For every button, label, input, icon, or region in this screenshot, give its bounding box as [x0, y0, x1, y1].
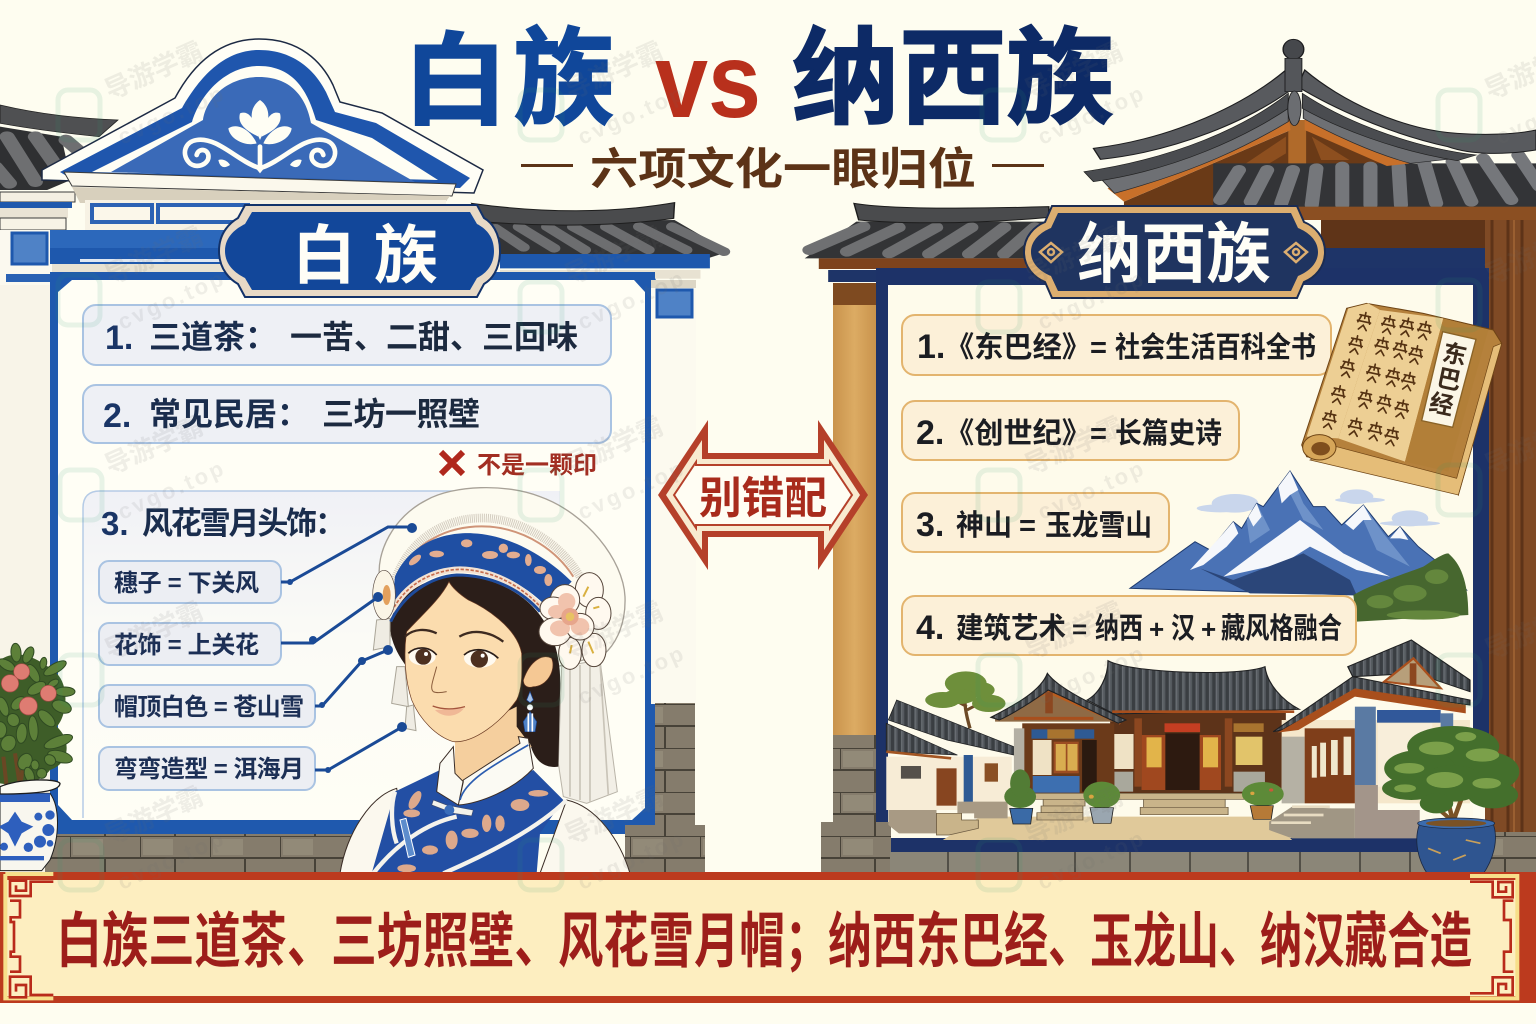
right tassel	[558, 660, 617, 803]
watermark row 3: 导游学霸	[560, 411, 667, 480]
banner: summary	[0, 872, 1536, 1003]
snow caps	[1190, 471, 1408, 577]
watermark row 5: 导游学霸	[560, 781, 667, 850]
card: Naxi item 4: 藏风格融合	[1221, 612, 1342, 645]
plant flowers	[1, 664, 56, 715]
left page	[1307, 303, 1380, 438]
watermark row 2: cvgo.top	[114, 265, 230, 335]
watermark row 1: 导游学霸	[560, 36, 667, 105]
watermark row 2: 导游学霸	[1020, 221, 1127, 290]
watermark row 1: cvgo.top	[574, 80, 690, 150]
large Naxi roof	[1084, 39, 1536, 220]
book title label	[1422, 332, 1476, 427]
tan pillar	[833, 283, 876, 870]
banner summary text: 白族三道茶、	[56, 908, 333, 975]
left wing	[886, 700, 1014, 833]
collar piping	[460, 745, 528, 800]
card: Naxi item 4: 汉	[1171, 612, 1195, 645]
face	[405, 582, 522, 742]
card: Naxi item 4: 4.	[916, 609, 944, 647]
card: Naxi item 4: 建筑艺术	[956, 612, 1066, 645]
card: Naxi item 1: 社会生活百科全书	[1115, 331, 1316, 364]
card: Naxi item 4: 纳西	[1095, 612, 1143, 645]
watermark row 1: 导游学霸	[1020, 36, 1127, 105]
navy frame	[876, 268, 1489, 852]
pill: flower: 花饰 = 上关花	[114, 632, 259, 659]
roll	[1303, 435, 1336, 460]
watermark row 2	[58, 221, 1536, 335]
subtitle: 六项文化一眼归位	[590, 145, 976, 194]
gable with floral crest	[42, 39, 483, 230]
stone base	[821, 822, 1536, 874]
banner summary text: 三坊照壁、	[331, 908, 560, 975]
watermark row 1	[58, 36, 1536, 150]
blue frame	[50, 272, 655, 834]
watermark row 4	[60, 596, 1536, 710]
blue vest	[372, 770, 563, 873]
watermark row 1: 导游学霸	[100, 36, 207, 105]
double-headed arrow: do not mismatch: 别错配	[699, 474, 827, 523]
watermark row 3: cvgo.top	[574, 455, 690, 525]
eye left	[408, 648, 437, 665]
right flower	[539, 573, 611, 669]
plant foliage mass	[0, 654, 67, 785]
card: Bai item 3: 3.	[101, 505, 129, 542]
connector dots	[287, 523, 417, 773]
watermark row 4: cvgo.top	[574, 640, 690, 710]
under tiles	[1213, 163, 1536, 208]
Dongba pictographs	[1321, 311, 1433, 446]
left roof of Naxi panel	[805, 203, 1049, 282]
vest trim	[373, 792, 567, 873]
illustration: Jade Dragon Snow Mountain	[1130, 471, 1468, 622]
watermark row 3	[60, 411, 1536, 525]
wood column	[1485, 220, 1536, 832]
peak shading	[1247, 471, 1410, 567]
watermark row 5	[60, 781, 1150, 895]
gable	[1124, 130, 1536, 208]
card: Naxi item 3: 神山	[956, 509, 1012, 542]
card: Bai item 1: 一苦、二甜、三回味	[290, 319, 578, 355]
wood beams	[1321, 220, 1536, 276]
brows	[405, 630, 503, 642]
band florals	[407, 539, 552, 586]
subtitle	[521, 145, 1044, 194]
watermark row 5: cvgo.top	[114, 825, 230, 895]
right wing	[1269, 640, 1470, 838]
card: Naxi item 3: =	[1019, 510, 1036, 542]
vest florals	[397, 789, 548, 872]
side button	[400, 818, 415, 857]
card: Naxi item 2	[902, 401, 1239, 460]
sleeves	[340, 788, 630, 873]
watermark row 5: 导游学霸	[100, 781, 207, 850]
watermark row 5: cvgo.top	[574, 825, 690, 895]
book cover	[1302, 303, 1502, 495]
card: Bai item 1: 1.	[105, 319, 133, 357]
callout: not yikeyin: 不是一颗印	[477, 452, 597, 479]
connector lines	[281, 523, 417, 773]
banner summary text: 风花雪月帽；	[558, 908, 830, 975]
pill: tassel: 穗子 = 下关风	[114, 570, 259, 597]
clouds	[1197, 489, 1440, 526]
watermark row 5: 导游学霸	[1020, 781, 1127, 850]
watermark row 3: 导游学霸	[100, 411, 207, 480]
plaque: Naxi: 纳西族	[1077, 217, 1271, 291]
mountain body	[1130, 471, 1467, 595]
card: Naxi item 4: +	[1149, 614, 1164, 644]
banner summary text: 玉龙山、	[1090, 908, 1262, 975]
book title label: 巴	[1434, 364, 1463, 396]
hall body	[1110, 712, 1286, 793]
knot ornament right	[1285, 243, 1307, 262]
steps	[936, 793, 1244, 835]
green hill	[1353, 553, 1468, 622]
nose and mouth	[432, 667, 465, 716]
watermark row 4: cvgo.top	[1034, 640, 1150, 710]
icon: Dongba scripture book	[1302, 303, 1502, 495]
card: Naxi item 4: =	[1072, 614, 1087, 644]
card: Naxi item 1: 1.	[917, 328, 945, 366]
hair	[390, 576, 560, 767]
page stack	[1310, 343, 1502, 495]
right roof of Bai panel	[472, 203, 729, 283]
potted plant 2	[1083, 782, 1120, 823]
banner right fret	[1470, 876, 1517, 998]
card: Naxi item 2: 《创世纪》	[945, 417, 1091, 450]
hill highlights	[1367, 569, 1460, 620]
plaque: Bai: 白 族	[292, 220, 438, 292]
card: Naxi item 3: 玉龙雪山	[1045, 509, 1152, 542]
card: Naxi item 3: 3.	[916, 506, 944, 544]
card: Naxi item 2: 2.	[916, 414, 944, 452]
left tassels	[373, 618, 416, 731]
plant stems	[3, 753, 24, 787]
blue beam	[50, 230, 232, 272]
watermark row 2: cvgo.top	[574, 265, 690, 335]
watermark row 4: 导游学霸	[1020, 596, 1127, 665]
card: Bai item 2: 常见民居：	[149, 396, 309, 432]
banner summary text: 纳西东巴经、	[828, 908, 1092, 975]
banner summary text	[56, 908, 1472, 975]
porcelain pot	[0, 780, 60, 871]
plant leaves	[0, 643, 75, 784]
knot ornament left	[1040, 243, 1062, 262]
ear	[523, 657, 553, 687]
watermark row 1: cvgo.top	[1034, 80, 1150, 150]
watermark row 1: cvgo.top	[114, 80, 230, 150]
panel: Bai building	[0, 39, 729, 875]
watermark row 2: 导游学霸	[100, 221, 207, 290]
double-headed arrow: do not mismatch	[658, 420, 868, 570]
scallop tiles	[1100, 105, 1457, 193]
title: Bai: 白	[403, 26, 508, 138]
pill: white top: 帽顶白色 = 苍山雪	[114, 694, 304, 721]
watermark row 3: cvgo.top	[114, 455, 230, 525]
finial	[1283, 39, 1304, 59]
eye right	[464, 649, 498, 668]
banner left fret	[5, 874, 53, 998]
second ridge	[1084, 93, 1476, 182]
card: Naxi item 4	[902, 596, 1356, 655]
knot button	[432, 800, 473, 816]
potted plant 3	[1242, 782, 1284, 819]
title	[403, 21, 1114, 140]
spine block	[1405, 318, 1488, 472]
pill: curved shape: 弯弯造型 = 洱海月	[114, 755, 304, 783]
book title label: 经	[1427, 389, 1456, 421]
panel interior	[58, 280, 645, 820]
plant and porcelain pot left	[0, 643, 75, 871]
plaque: Bai	[219, 205, 500, 297]
left side roof	[0, 105, 118, 190]
figure: Bai woman in Fenghuaxueyue headdress	[340, 488, 630, 873]
mountain shadow	[1147, 553, 1357, 595]
card: Naxi item 1	[902, 315, 1331, 375]
watermark row 4: 导游学霸	[560, 596, 667, 665]
book title label: 东	[1440, 339, 1469, 371]
card: Naxi item 3	[902, 493, 1169, 552]
watermark row 5: cvgo.top	[1034, 825, 1150, 895]
title: vs: vs	[655, 22, 761, 140]
floral ornament	[185, 100, 335, 173]
card: Naxi item 1: 《东巴经》	[945, 331, 1091, 364]
tree	[925, 671, 1006, 728]
hat red line	[397, 526, 573, 580]
right page	[1338, 310, 1443, 462]
card: Bai item 1: 三道茶：	[149, 319, 277, 355]
pill: white top	[99, 685, 315, 727]
card: Bai item 2	[83, 385, 611, 443]
left flower	[373, 570, 395, 620]
watermark row 3: 导游学霸	[1020, 411, 1127, 480]
earring	[523, 692, 537, 732]
pill: curved shape	[99, 747, 315, 790]
title: Naxi: 纳西族	[792, 21, 1114, 138]
card: Bai item 1	[83, 305, 611, 365]
right pillar	[651, 280, 696, 704]
pill: flower	[99, 623, 281, 665]
watermark row 2: 导游学霸	[560, 221, 667, 290]
potted plant 1	[1004, 769, 1036, 824]
beams	[1298, 207, 1536, 220]
card: Bai item 3	[83, 491, 560, 818]
orange eave	[1108, 117, 1410, 202]
watermark row 4: 导游学霸	[100, 596, 207, 665]
roll hole	[1311, 442, 1330, 455]
watermark row 2: cvgo.top	[1034, 265, 1150, 335]
band red dash	[392, 569, 543, 612]
tassel lines	[570, 662, 608, 802]
big potted plant	[1382, 726, 1519, 875]
pill: tassel	[99, 561, 281, 603]
blue band	[392, 533, 572, 608]
card: Naxi item 2: 长篇史诗	[1115, 417, 1222, 450]
panel: Naxi building	[805, 39, 1536, 874]
panel interior	[888, 285, 1473, 838]
illustration: Naxi courtyard house	[886, 640, 1519, 875]
band lower line	[391, 575, 540, 622]
main hall roof	[1087, 661, 1299, 714]
courtyard ground	[943, 817, 1292, 840]
hat fringe	[395, 518, 580, 580]
card: Naxi item 4: +	[1201, 614, 1216, 644]
top ridge	[1093, 70, 1536, 159]
left pavilion	[991, 673, 1126, 793]
card: Naxi item 2: =	[1090, 418, 1107, 450]
headdress	[379, 488, 625, 667]
card: Bai item 2: 2.	[103, 397, 131, 435]
watermark row 3: cvgo.top	[1034, 455, 1150, 525]
neck	[455, 707, 532, 782]
title: zu: 族	[514, 21, 614, 139]
left wing wall	[0, 192, 75, 875]
plaque: Naxi	[1024, 206, 1325, 298]
band trim	[392, 569, 543, 612]
brick walls	[45, 703, 705, 873]
card: Bai item 2: 三坊一照壁	[322, 396, 480, 432]
card: Naxi item 1: =	[1090, 332, 1107, 364]
collar	[437, 737, 533, 805]
card: Bai item 3: 风花雪月头饰：	[142, 506, 346, 541]
